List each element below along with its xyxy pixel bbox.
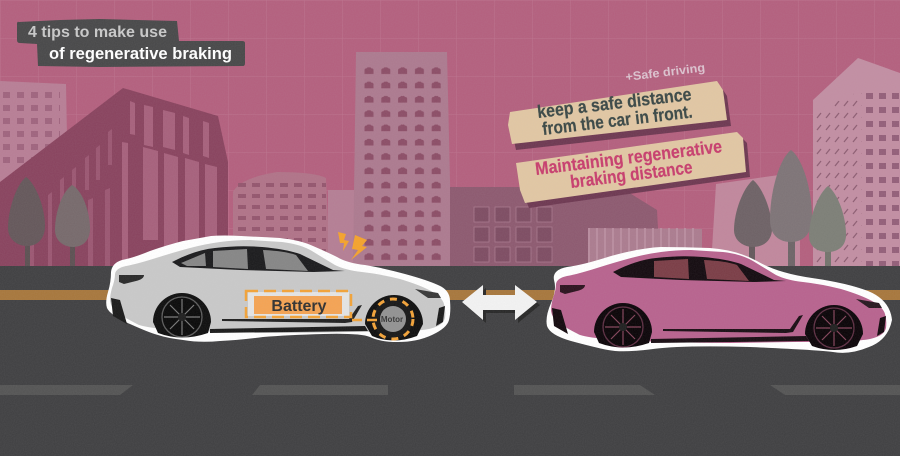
pink car rear wheel (594, 303, 652, 348)
under body shadow (210, 326, 368, 333)
rear light (119, 275, 144, 284)
rear wheel (153, 293, 211, 338)
sill line (222, 305, 362, 323)
battery: Battery (271, 298, 327, 315)
background sky (0, 0, 900, 270)
note: keep a safe distance (508, 81, 731, 150)
pink car under body shadow (651, 336, 809, 343)
lightning bolts (338, 232, 367, 260)
note: keep a safe distance: from the car in front. (541, 101, 693, 139)
note: maintaining regenerative braking distance: braking distance (569, 157, 694, 192)
title: 4 tips to make use (28, 24, 167, 41)
pink car body (551, 250, 886, 343)
building: tall tower (353, 52, 452, 266)
road centre stripe (0, 290, 900, 300)
building: isometric right (813, 58, 900, 266)
building: round tower (233, 172, 330, 266)
road (0, 266, 900, 456)
building: low brick block (450, 187, 702, 266)
motor dashed ring (373, 299, 413, 339)
road lane dashes (0, 385, 900, 395)
pink car sill line (663, 315, 803, 333)
pink car front wheel (805, 305, 863, 350)
pink car front vent (877, 316, 886, 336)
front wheel (365, 295, 423, 340)
note: maintaining regenerative braking distance: Maintaining regenerative (534, 136, 723, 179)
pink car (546, 247, 892, 353)
trees: right group (734, 150, 846, 266)
car outline sticker (106, 236, 450, 342)
label: safe driving: +Safe driving (625, 60, 706, 84)
trees: left pair (8, 177, 90, 266)
grey car (106, 236, 450, 342)
pink car windows (613, 256, 786, 282)
building: dark corner block (0, 88, 228, 266)
building: pale right block (711, 172, 800, 266)
pink car rear light (560, 285, 585, 294)
distance arrow (462, 285, 540, 323)
car body (110, 240, 445, 333)
building: small pale block (328, 190, 358, 266)
pink car outline sticker (546, 247, 892, 353)
motor label: Motor (381, 315, 403, 324)
note: keep a safe distance: keep a safe distance (536, 84, 692, 122)
title (17, 19, 245, 67)
front light (415, 289, 441, 298)
car windows (172, 246, 345, 272)
battery (246, 291, 351, 317)
title: of regenerative braking (49, 45, 232, 63)
pink car rear vent (552, 308, 568, 334)
pink car front light (856, 299, 882, 308)
front bumper vent (436, 306, 445, 326)
motor connector (352, 319, 378, 321)
building: pale left (0, 81, 68, 190)
note: maintaining regenerative braking distance (516, 132, 750, 208)
rear bumper vent (111, 298, 127, 324)
